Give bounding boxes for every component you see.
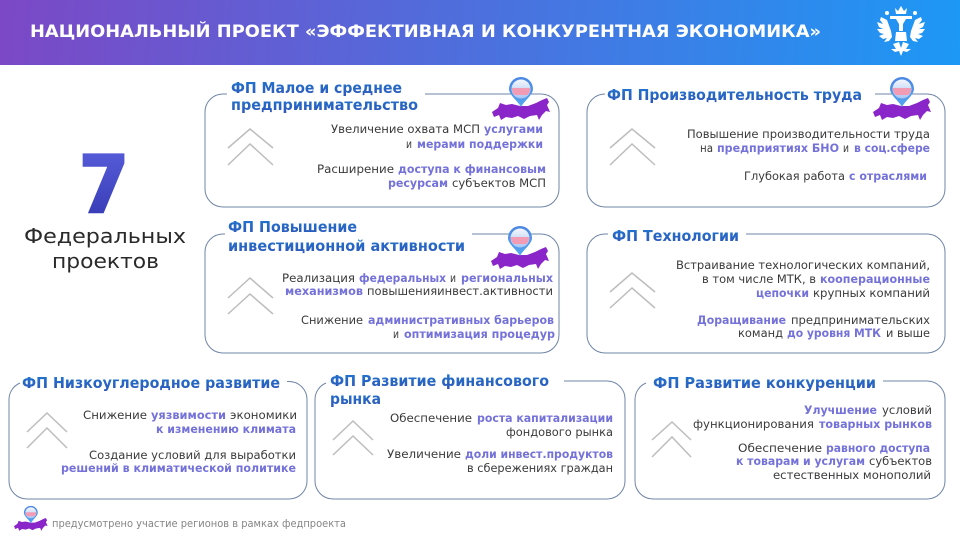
panel: financial market: фондового рынка	[506, 425, 613, 439]
panel: technologies: до уровня МТК	[787, 326, 882, 340]
panel: small and medium business: ресурсам	[388, 176, 448, 190]
panel: investment activity: и	[450, 271, 456, 285]
panel: competition: естественных монополий	[773, 468, 931, 482]
federal projects label	[24, 224, 186, 273]
panel: competition: Улучшение	[804, 403, 877, 417]
panel: small and medium business: ФП Малое и среднее	[231, 79, 402, 97]
panel: small and medium business: Увеличение охвата МСП	[331, 122, 480, 136]
panel: labour productivity: и	[843, 141, 849, 155]
panel: low-carbon development	[9, 374, 307, 499]
panel: small and medium business: доступа к финансовым	[398, 162, 546, 176]
panel: financial market: роста капитализации	[477, 411, 613, 425]
panel: small and medium business: предпринимательство	[231, 96, 418, 114]
panel: small and medium business: субъектов МСП	[452, 176, 546, 190]
legend text: предусмотрено участие регионов в рамках федпроекта	[52, 519, 346, 530]
panel: investment activity: оптимизация процедур	[404, 327, 555, 341]
panel: technologies: ФП Технологии	[612, 227, 739, 245]
panel: competition: равного доступа	[826, 441, 930, 455]
federal projects label: Федеральных	[24, 224, 186, 248]
panel: technologies: кооперационные	[820, 272, 930, 286]
panel: financial market	[315, 372, 625, 499]
panel: labour productivity	[587, 77, 945, 207]
icon: emblem eagle	[877, 6, 925, 56]
panel: labour productivity: предприятиях БНО	[717, 141, 839, 155]
panel: investment activity	[205, 218, 559, 353]
panel: small and medium business: и	[406, 137, 412, 151]
panel: small and medium business	[205, 77, 559, 207]
panel: low-carbon development: решений в климатической политике	[61, 461, 296, 475]
panel: low-carbon development: экономики	[230, 408, 297, 422]
icon: region pin on map	[491, 226, 549, 269]
panel: labour productivity: Повышение производительности труда	[687, 127, 930, 141]
panel: financial market: доли инвест.продуктов	[465, 447, 613, 461]
panel: small and medium business: услугами	[484, 122, 543, 136]
panel: technologies: Доращивание	[697, 313, 786, 327]
panel: labour productivity: Глубокая работа	[744, 169, 845, 183]
panel: labour productivity: с отраслями	[849, 169, 927, 183]
panel: technologies: цепочки	[756, 286, 809, 300]
panel: competition: условий	[882, 403, 932, 417]
panel: technologies: в том числе МТК, в	[702, 272, 816, 286]
panel: financial market: Обеспечение	[390, 411, 472, 425]
panel: financial market: ФП Развитие финансового	[330, 372, 549, 390]
panel: small and medium business: Расширение	[317, 162, 394, 176]
panel: investment activity: Снижение	[301, 313, 363, 327]
federal projects label: проектов	[52, 249, 159, 273]
panel: investment activity: инвестиционной активности	[228, 237, 465, 255]
panel: labour productivity: в соц.сфере	[854, 141, 930, 155]
panel: investment activity: и	[393, 327, 399, 341]
panel: labour productivity: ФП Производительность труда	[607, 86, 862, 104]
icon: region pin on map	[873, 77, 931, 120]
panel: investment activity: Реализация	[282, 271, 355, 285]
panel: investment activity: федеральных	[359, 271, 447, 285]
panel: small and medium business: мерами поддержки	[417, 137, 543, 151]
panel: investment activity: административных барьеров	[368, 313, 554, 327]
panel: financial market: Увеличение	[387, 447, 461, 461]
panel: low-carbon development: к изменению климата	[156, 422, 296, 436]
panel: technologies: крупных компаний	[813, 286, 930, 300]
legend icon: region pin on map	[14, 506, 48, 531]
panel: low-carbon development: ФП Низкоуглеродное развитие	[22, 374, 280, 392]
header band	[0, 0, 960, 65]
panel: low-carbon development: Снижение	[83, 408, 147, 422]
panel: competition: к товарам и услугам	[736, 454, 865, 468]
big number seven: 7	[79, 141, 129, 231]
panel: competition: функционирования	[693, 417, 814, 431]
panel: financial market: рынка	[330, 390, 381, 408]
panel: competition: товарных рынков	[819, 417, 932, 431]
title: НАЦИОНАЛЬНЫЙ ПРОЕКТ «ЭФФЕКТИВНАЯ И КОНКУРЕНТНАЯ ЭКОНОМИКА»	[30, 20, 821, 42]
panel: technologies: Встраивание технологических компаний,	[676, 258, 930, 272]
panel: investment activity: региональных	[461, 271, 554, 285]
icon: region pin on map	[492, 77, 550, 120]
panel: financial market: в сбережениях граждан	[467, 461, 613, 475]
panel: competition	[635, 374, 945, 499]
panel: technologies: и выше	[886, 326, 930, 340]
panel: investment activity: механизмов	[285, 284, 363, 298]
panel: investment activity: повышенияинвест.активности	[367, 284, 553, 298]
panel: competition: субъектов	[869, 454, 932, 468]
panel: technologies: команд	[738, 326, 783, 340]
panel: low-carbon development: уязвимости	[151, 408, 226, 422]
panel: technologies	[587, 227, 945, 353]
panel: investment activity: ФП Повышение	[228, 218, 357, 236]
panel: labour productivity: на	[700, 141, 713, 155]
panel: technologies: предпринимательских	[791, 313, 930, 327]
panel: competition: Обеспечение	[738, 441, 822, 455]
panel: low-carbon development: Создание условий для выработки	[89, 448, 296, 462]
panel: competition: ФП Развитие конкуренции	[653, 374, 876, 392]
